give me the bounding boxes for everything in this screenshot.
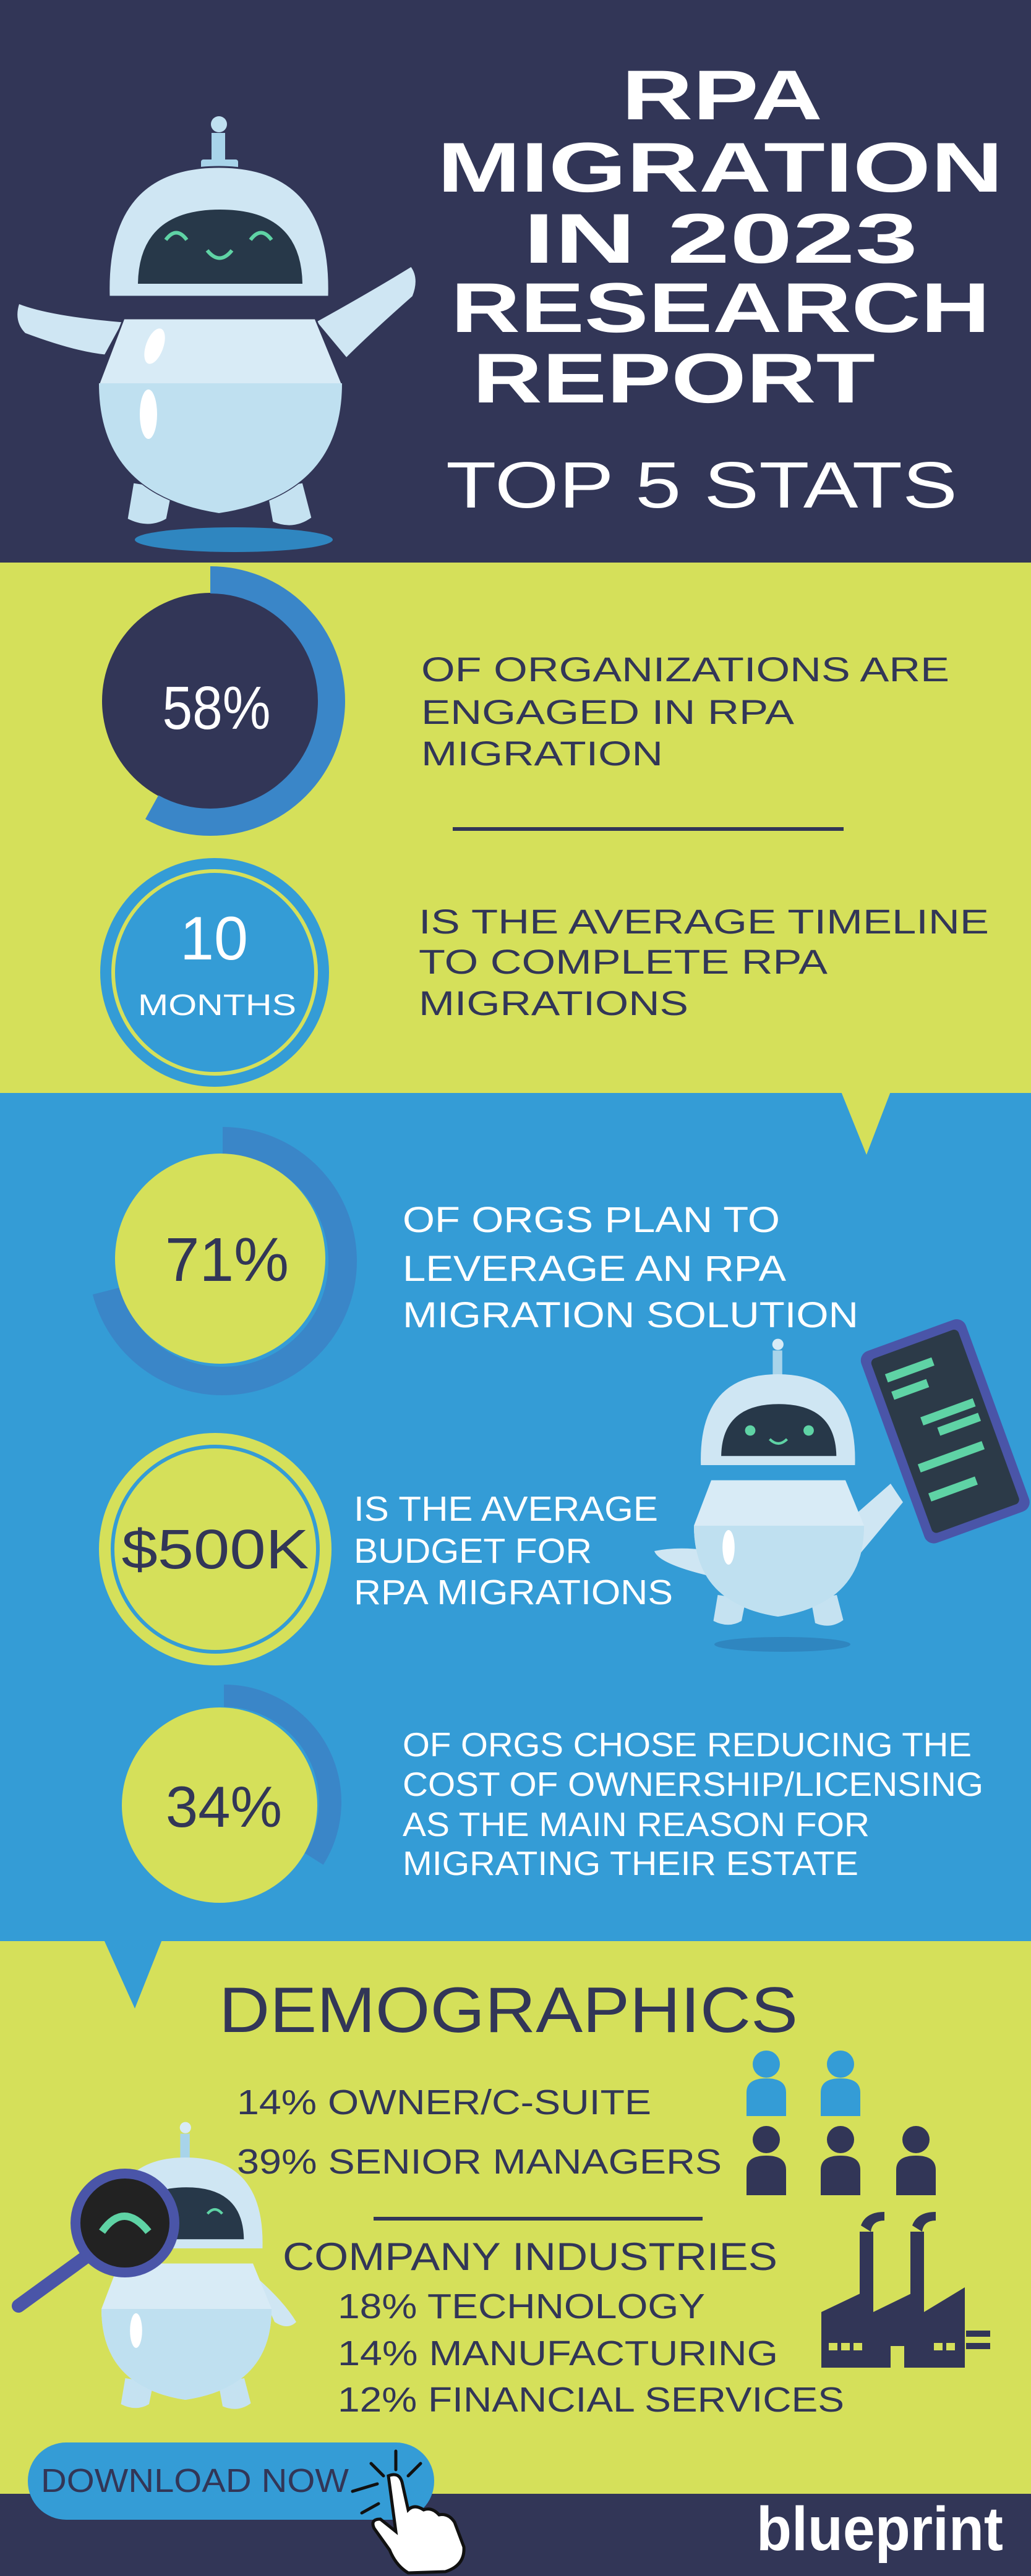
title: REPORT <box>473 339 875 418</box>
stat 2: 10 months circle: 10 <box>180 904 248 972</box>
stat 2 text: TO COMPLETE RPA <box>419 942 828 981</box>
stat 3 text: OF ORGS PLAN TO <box>403 1200 780 1240</box>
download button: DOWNLOAD NOW <box>41 2462 349 2499</box>
stat 2 text: IS THE AVERAGE TIMELINE <box>419 902 989 941</box>
green stats panel <box>0 563 1031 1093</box>
header panel <box>0 0 1031 563</box>
title: RESEARCH <box>451 269 990 347</box>
logo: blueprint: blueprint <box>756 2494 1003 2564</box>
stat 2 text: MIGRATIONS <box>419 984 688 1022</box>
footer <box>0 2494 1031 2576</box>
stat 3: 71% donut <box>103 1141 343 1381</box>
stat 2: 10 months circle: MONTHS <box>138 989 296 1022</box>
arrow notch: blue into green <box>104 1940 162 2009</box>
stat 3 text: MIGRATION SOLUTION <box>403 1295 858 1335</box>
stat 5 text: OF ORGS CHOSE REDUCING THE <box>403 1725 972 1764</box>
icon: hand cursor <box>353 2451 464 2573</box>
industries text: 18% TECHNOLOGY <box>338 2287 705 2326</box>
stat 5: 34% donut: 34% <box>166 1774 282 1839</box>
icon: people <box>747 2051 936 2195</box>
stat 1 text: ENGAGED IN RPA <box>421 692 795 731</box>
demographics panel <box>0 1941 1031 2497</box>
icon: factory <box>821 2212 990 2368</box>
stat 1: 58% donut <box>89 580 332 822</box>
job roles text: 14% OWNER/C-SUITE <box>237 2083 651 2122</box>
industries text: COMPANY INDUSTRIES <box>283 2235 777 2279</box>
magnifier <box>19 2256 87 2306</box>
download button <box>28 2442 434 2520</box>
job roles text: 39% SENIOR MANAGERS <box>237 2142 722 2182</box>
stat 4: $500K circle <box>99 1433 332 1665</box>
stat 1 text <box>421 650 949 773</box>
industries text <box>283 2235 844 2420</box>
stat 4 text: RPA MIGRATIONS <box>354 1573 673 1612</box>
stat 4 text: IS THE AVERAGE <box>354 1489 658 1529</box>
title: MIGRATION <box>437 129 1003 207</box>
title <box>437 56 1003 418</box>
stat 5 text <box>403 1725 983 1882</box>
stat 4: $500K circle: $500K <box>121 1519 309 1581</box>
title: RPA <box>622 56 823 135</box>
title: IN 2023 <box>523 200 918 278</box>
stat 5 text: COST OF OWNERSHIP/LICENSING <box>403 1765 983 1803</box>
industries text: 12% FINANCIAL SERVICES <box>338 2380 844 2420</box>
demographics heading: DEMOGRAPHICS <box>219 1975 798 2046</box>
stat 3: 71% donut: 71% <box>165 1225 289 1294</box>
robot 2 with tablet <box>654 1316 1031 1652</box>
subtitle: top 5 stats: TOP 5 STATS <box>446 449 957 522</box>
stat 3 text <box>403 1200 858 1335</box>
stat 1: 58% donut: 58% <box>162 674 271 742</box>
blue stats panel <box>0 1093 1031 1941</box>
job roles text <box>237 2083 722 2182</box>
robot 3 with magnifier <box>19 2122 296 2409</box>
stat 4 text: BUDGET FOR <box>354 1531 592 1571</box>
stat 5 text: AS THE MAIN REASON FOR <box>403 1805 870 1843</box>
stat 2 text <box>419 902 989 1022</box>
robot 1: waving <box>17 116 416 552</box>
stat 2: 10 months circle <box>100 858 329 1087</box>
arrow notch: green into blue <box>841 1092 891 1155</box>
stat 5: 34% donut <box>118 1696 330 1908</box>
tablet <box>858 1316 1031 1546</box>
stat 1 text: MIGRATION <box>421 734 663 773</box>
stat 1 text: OF ORGANIZATIONS ARE <box>421 650 949 689</box>
stat 4 text <box>354 1489 673 1612</box>
stat 3 text: LEVERAGE AN RPA <box>403 1249 786 1289</box>
stat 5 text: MIGRATING THEIR ESTATE <box>403 1844 858 1882</box>
industries text: 14% MANUFACTURING <box>338 2334 778 2373</box>
